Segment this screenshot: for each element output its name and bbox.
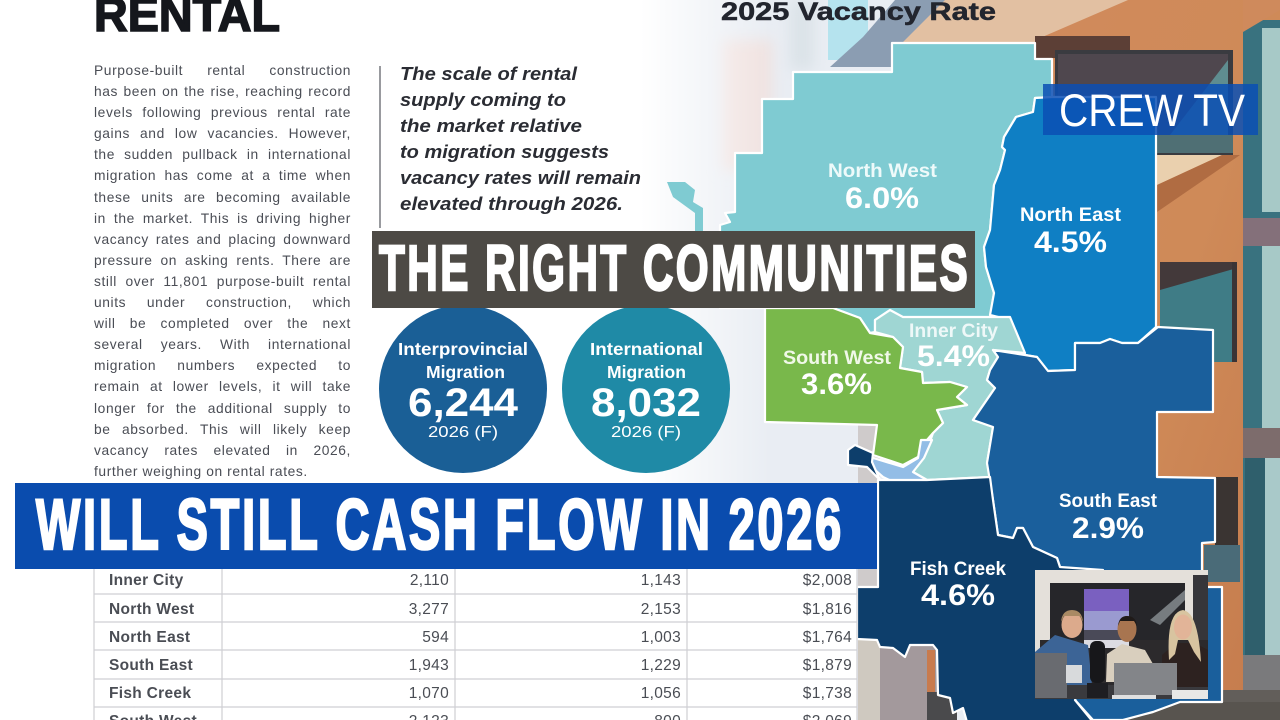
region: South East	[973, 327, 1222, 720]
pull quote: vacancy rates will remain	[400, 168, 641, 188]
table row: Inner City: Inner City	[109, 572, 184, 589]
circle: International Migration: International	[590, 339, 703, 359]
body text paragraph: the sudden pullback in international	[94, 147, 351, 162]
table row: Fish Creek: 1,070	[409, 685, 449, 702]
label: North East 4.5%: 4.5%	[1034, 226, 1107, 259]
table row: North East	[109, 629, 852, 646]
pull quote: supply coming to	[400, 90, 566, 110]
table row: South East: South East	[109, 657, 193, 674]
label: South East 2.9%: South East	[1059, 491, 1158, 512]
region: South West	[765, 308, 967, 465]
map: Calgary vacancy rates by region	[667, 43, 1222, 720]
pull quote: The scale of rental	[400, 64, 578, 84]
body text paragraph: vacancy rates and placing downward	[94, 232, 351, 247]
pull quote	[380, 64, 641, 228]
body text paragraph: gains and low vacancies. However,	[94, 126, 351, 141]
table row: North West: 2,153	[641, 601, 681, 618]
circle: International Migration: Migration	[607, 362, 686, 382]
photo: laptop left	[1035, 653, 1082, 698]
label: North East 4.5%: North East	[1020, 205, 1122, 226]
body text paragraph: these units are becoming available	[94, 190, 351, 205]
watermark: CREW TV: CREW TV	[1059, 85, 1245, 136]
table row: North West: $1,816	[803, 601, 852, 618]
circle: International Migration: 2026 (F)	[611, 424, 681, 441]
photo: microphone	[1087, 641, 1108, 698]
body text paragraph: be absorbed. This will likely keep	[94, 422, 351, 437]
label: North West 6.0%	[828, 161, 938, 215]
photo: woman with blonde hair	[1162, 610, 1208, 687]
body text paragraph: still over 11,801 purpose-built rental	[94, 274, 351, 289]
label: Inner City 5.4%	[909, 321, 998, 373]
table row: Fish Creek: $1,738	[803, 685, 852, 702]
pull quote: the market relative	[400, 116, 582, 136]
table row: Inner City: $2,008	[803, 572, 852, 589]
label: Inner City 5.4%: 5.4%	[917, 340, 990, 373]
body text paragraph: Purpose-built rental construction	[94, 63, 351, 78]
map labels	[783, 161, 1158, 612]
body text paragraph: will be completed over the next	[94, 316, 351, 331]
body text paragraph: remain at lower levels, it will take	[94, 379, 351, 394]
label: Fish Creek 4.6%	[910, 559, 1006, 612]
label: South West 3.6%: 3.6%	[801, 368, 872, 401]
banner: WILL STILL CASH FLOW IN 2026: WILL STILL CASH FLOW IN 2026	[36, 485, 841, 564]
body text paragraph: migration numbers expected to	[94, 358, 351, 373]
label: North West 6.0%: North West	[828, 161, 938, 182]
label: Fish Creek 4.6%: Fish Creek	[910, 559, 1006, 580]
region: Fish Creek	[857, 477, 1103, 720]
region: reservoir	[870, 440, 932, 488]
table row: Inner City: 2,110	[410, 572, 449, 589]
body text paragraph: has been on the rise, reaching record	[94, 84, 351, 99]
label: South West 3.6%	[783, 348, 892, 401]
body text paragraph: in the market. This is driving higher	[94, 211, 351, 226]
body text paragraph: units under construction, which	[94, 295, 351, 310]
photo: laptop centre	[1112, 663, 1208, 699]
label: South East 2.9%: 2.9%	[1072, 512, 1144, 545]
label: North West 6.0%: 6.0%	[845, 182, 919, 215]
table row: Inner City	[109, 572, 852, 589]
region: North West	[720, 43, 1052, 333]
lower-left tower	[858, 640, 940, 720]
body text paragraph: further weighing on rental rates.	[94, 464, 308, 479]
label: Fish Creek 4.6%: 4.6%	[921, 579, 995, 612]
table row: Fish Creek	[109, 685, 852, 702]
circle: Interprovincial Migration: 2026 (F)	[428, 424, 498, 441]
label: Inner City 5.4%: Inner City	[909, 321, 998, 342]
table row: South East: $1,879	[803, 657, 852, 674]
inset photo: three podcast hosts	[1035, 570, 1208, 699]
label: South West 3.6%: South West	[783, 348, 892, 369]
table row: North East: North East	[109, 629, 190, 646]
body text paragraph: levels following previous rental rate	[94, 105, 351, 120]
label: South East 2.9%	[1059, 491, 1158, 545]
region: Inner City	[875, 310, 1025, 480]
table row: South West	[109, 713, 852, 720]
banner: THE RIGHT COMMUNITIES: THE RIGHT COMMUNITIES	[379, 233, 968, 304]
pull quote: elevated through 2026.	[400, 194, 623, 214]
body text paragraph	[94, 63, 351, 479]
table row: Fish Creek: Fish Creek	[109, 685, 191, 702]
lower wall	[1215, 477, 1238, 547]
pull quote: to migration suggests	[400, 142, 609, 162]
table row: North West: 3,277	[409, 601, 449, 618]
table row: Fish Creek: 1,056	[641, 685, 681, 702]
data table	[94, 560, 857, 720]
circle: Interprovincial Migration: 6,244	[408, 381, 519, 425]
table row: North East: 1,003	[641, 629, 681, 646]
table row: South East: 1,943	[409, 657, 449, 674]
region: North East	[984, 97, 1156, 371]
table row: North West	[109, 601, 852, 618]
body text paragraph: longer for the additional supply to	[94, 400, 351, 416]
photo: man in cream sweater	[1106, 616, 1153, 682]
table row: Inner City: 1,143	[641, 572, 681, 589]
table row: North West: North West	[109, 601, 194, 618]
right window column	[1243, 20, 1280, 720]
table row: North East: $1,764	[803, 629, 852, 646]
region: Fish Creek north tip	[848, 445, 880, 480]
body text paragraph: pressure on asking rents. There are	[94, 253, 351, 268]
region: small river shape	[667, 182, 703, 232]
body text paragraph: several years. With international	[94, 337, 351, 352]
body text paragraph: migration has come at a time when	[94, 168, 351, 183]
label: North East 4.5%	[1020, 205, 1122, 259]
table row: South East	[109, 657, 852, 674]
circle: Interprovincial Migration: Migration	[426, 362, 505, 382]
table row: North East: 594	[422, 629, 449, 646]
table row: South East: 1,229	[641, 657, 681, 674]
circle: Interprovincial Migration: Interprovincial	[398, 339, 528, 359]
photo: purple backdrop banner	[1084, 589, 1129, 648]
circle: International Migration	[562, 305, 730, 473]
photo: man in blue shirt	[1035, 610, 1092, 685]
circle: Interprovincial Migration	[379, 305, 547, 473]
body text paragraph: vacancy rates elevated in 2026,	[94, 443, 351, 458]
circle: International Migration: 8,032	[591, 381, 701, 425]
